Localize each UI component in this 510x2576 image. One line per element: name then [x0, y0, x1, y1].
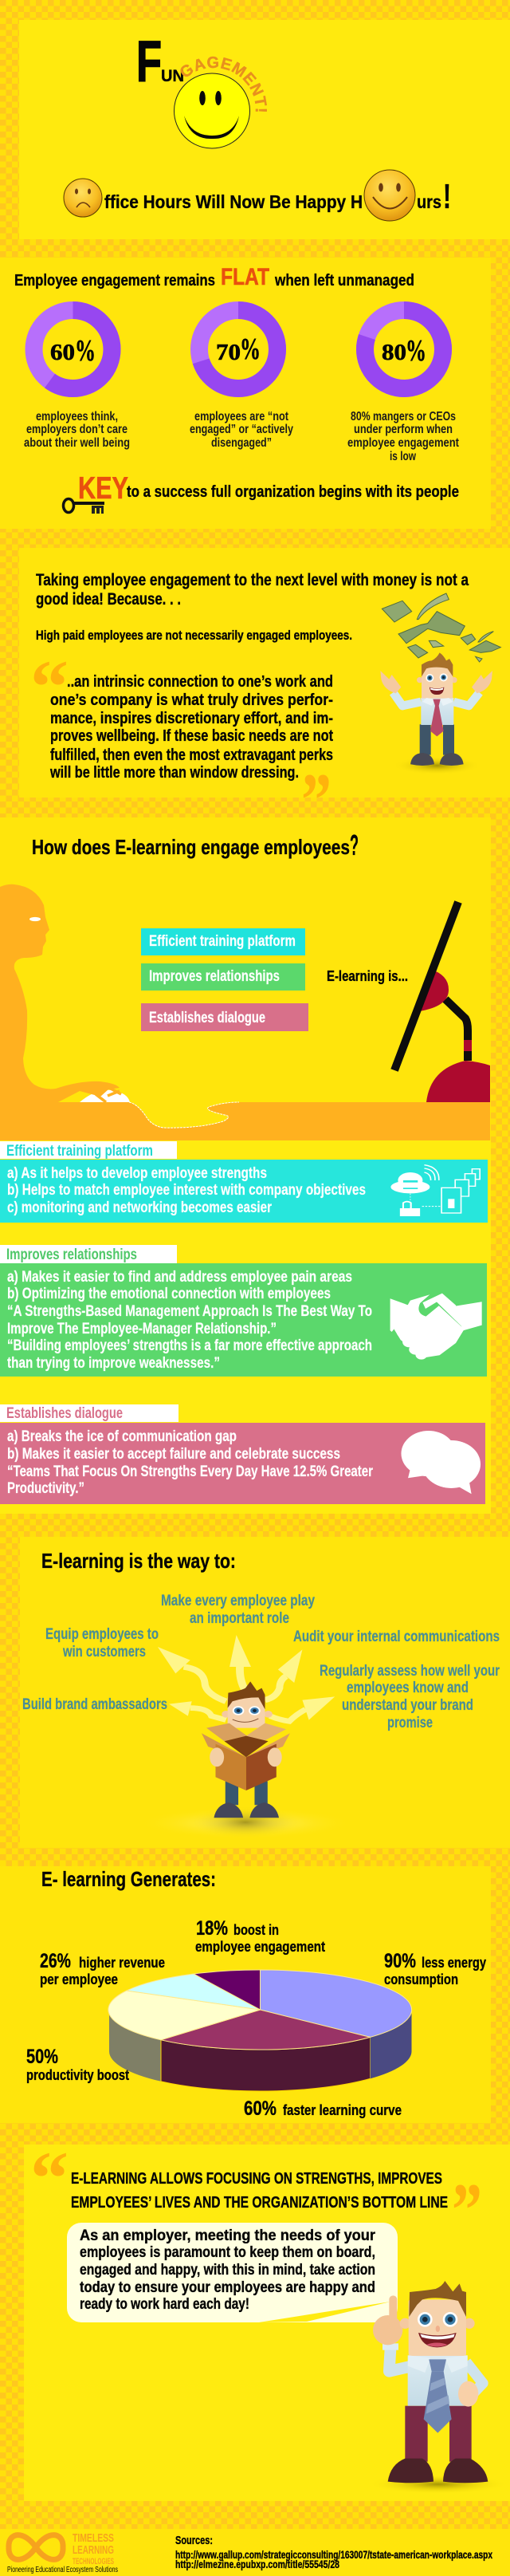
footer logo: timeless learning technologies: LEARNING	[73, 2543, 114, 2557]
panel: efficient training platform: c) monitoring and networking becomes easier	[7, 1199, 272, 1216]
icon: handshake	[390, 1294, 482, 1360]
panel: improves relationships	[0, 1245, 487, 1377]
heading: how does e-learning engage employees	[32, 829, 359, 861]
title: Fungagement: GAGEMENT!	[180, 56, 267, 112]
title: Fungagement: F	[136, 30, 162, 94]
icon: sad face	[64, 179, 102, 217]
donut chart: 80%: 80	[382, 340, 406, 365]
panel: efficient training platform: b) Helps to match employee interest with company objectives	[7, 1182, 366, 1199]
label: 18%: boost in	[233, 1922, 279, 1938]
menu box: establishes dialogue	[141, 1003, 308, 1031]
caption: 70%	[190, 410, 293, 450]
heading: engagement remains flat	[14, 264, 414, 290]
donut chart: 60%: 60	[50, 340, 75, 365]
donut chart: 60%: %	[75, 334, 96, 368]
icon: key	[64, 499, 104, 514]
sources	[175, 2534, 492, 2570]
footer logo: timeless learning technologies	[7, 2531, 118, 2574]
key message: KEY	[78, 471, 128, 506]
heading: engagement remains flat: when left unmanaged	[274, 272, 414, 290]
closing headline quote	[30, 2136, 482, 2252]
label: 26%: 26%	[40, 1950, 71, 1972]
label: 18%: 18%	[196, 1917, 228, 1940]
panel: money is not a good idea: ”	[301, 758, 332, 842]
labels: e-learning goals: Build brand ambassadors	[22, 1696, 167, 1713]
labels: e-learning goals: Equip employees to	[45, 1626, 159, 1643]
label: 60%: faster learning curve	[283, 2102, 402, 2118]
label: 50%: productivity boost	[26, 2067, 129, 2083]
donut chart: 70%: %	[240, 333, 261, 366]
sources: http://elmezine.epubxp.com/title/55545/28	[175, 2558, 339, 2570]
heading: e-learning is the way to: E-learning is the way to:	[41, 1549, 236, 1573]
speech bubble: today to ensure your employees are happy and	[80, 2279, 375, 2296]
title: Fungagement	[136, 30, 267, 148]
caption: 60%: employers don’t care	[26, 423, 128, 436]
panel: establishes dialogue	[0, 1404, 485, 1504]
caption: 70%: employees are “not	[194, 410, 289, 423]
panel: money is not a good idea: good idea! Because. . .	[36, 590, 181, 609]
panel: efficient training platform	[0, 1141, 488, 1223]
menu box: improves relationships: Improves relationships	[149, 968, 280, 985]
text block: quote	[49, 673, 333, 782]
text block: quote: ..an intrinsic connection to one’s work and	[67, 673, 333, 691]
label: 50%: 50%	[26, 2046, 58, 2068]
text block: quote: fulfilled, then even the most extravagant perks	[50, 746, 333, 764]
panel: improves relationships: than trying to improve weaknesses.”	[7, 1355, 220, 1372]
icon: big smiley	[174, 73, 250, 148]
menu box: improves relationships	[141, 963, 305, 991]
heading: how does e-learning engage employees: How does E-learning engage employees	[32, 835, 350, 859]
speech bubble	[67, 2223, 398, 2322]
panel: improves relationships: Improves relationships	[6, 1247, 137, 1263]
panel: money is not a good idea: “	[30, 644, 69, 729]
donut chart: 70%	[199, 310, 277, 388]
caption: 80%: employee engagement	[347, 436, 460, 450]
caption: 70%: disengaged”	[211, 436, 272, 450]
label: 60%: 60%	[244, 2097, 277, 2120]
key message: to a success full organization begins with its people	[127, 483, 459, 501]
caption: 80%: is low	[390, 450, 416, 463]
panel: improves relationships: a) Makes it easier to find and address employee pain areas	[7, 1269, 352, 1286]
heading: engagement remains flat: FLAT	[221, 264, 269, 290]
menu box: establishes dialogue: Establishes dialogue	[149, 1010, 265, 1026]
speech bubble: engaged and happy, with this in mind, take action	[80, 2262, 375, 2279]
monitor	[394, 902, 490, 1102]
panel: improves relationships: b) Optimizing the emotional connection with employees	[7, 1286, 331, 1302]
text block: quote: mance, inspires discretionary effort, and im-	[50, 710, 333, 727]
heading: engagement remains flat: Employee engagement remains	[14, 272, 215, 290]
label: 18%: employee engagement	[195, 1939, 325, 1955]
closing headline quote: ”	[452, 2168, 482, 2252]
illustration: person at computer	[0, 884, 490, 1140]
caption: 60%: employees think,	[36, 410, 118, 423]
subtitle: office hours	[64, 170, 451, 221]
labels: e-learning goals	[22, 1593, 500, 1731]
pie chart	[108, 1970, 412, 2091]
label: 90%: 90%	[384, 1950, 416, 1972]
label: 60%	[244, 2097, 402, 2120]
subtitle: office hours: !	[443, 177, 451, 216]
icon: speech bubbles	[401, 1431, 481, 1494]
title: Fungagement: UN	[161, 67, 184, 85]
labels: e-learning goals: promise	[387, 1715, 433, 1731]
money bills	[382, 593, 500, 662]
labels: e-learning goals: win customers	[62, 1644, 146, 1660]
icon: happy face	[364, 170, 415, 221]
label: 50%	[26, 2046, 129, 2083]
labels: e-learning goals: an important role	[190, 1610, 289, 1627]
label: 90%: less energy	[422, 1955, 486, 1971]
key message	[64, 471, 459, 514]
text block: quote: proves wellbeing. If these basic needs are not	[50, 727, 333, 745]
caption: 80%: 80% mangers or CEOs	[351, 410, 456, 423]
text block: quote: will be little more than window dressing.	[49, 764, 299, 782]
label: 18%	[195, 1917, 325, 1955]
panel: improves relationships: “Building employees’ strengths is a far more effective approach	[7, 1337, 372, 1354]
caption: 80%: under perform when	[354, 423, 453, 436]
label: 26%: per employee	[40, 1971, 118, 1987]
label: 26%: higher revenue	[79, 1955, 165, 1971]
panel: improves relationships: “A Strengths-Based Management Approach Is The Best Way To	[7, 1303, 372, 1320]
icon: cloud and devices	[390, 1165, 480, 1216]
panel: efficient training platform: a) As it helps to develop employee strengths	[7, 1165, 267, 1182]
label: 90%	[384, 1950, 486, 1987]
donut chart: 80%: %	[406, 334, 426, 368]
footer logo: timeless learning technologies: TECHNOLOGIES	[73, 2557, 114, 2566]
caption: 60%: about their well being	[24, 436, 130, 450]
sources: Sources:	[175, 2534, 213, 2547]
panel: money is not a good idea: High paid employees are not necessarily engaged employees.	[36, 628, 352, 643]
panel: efficient training platform: Efficient training platform	[6, 1143, 153, 1160]
panel: establishes dialogue: b) Makes it easier to accept failure and celebrate success	[7, 1446, 340, 1463]
panel: money is not a good idea	[30, 571, 469, 842]
label: 90%: consumption	[384, 1971, 458, 1987]
caption: 80%	[347, 410, 460, 463]
speech bubble: ready to work hard each day!	[80, 2296, 249, 2313]
footer logo: timeless learning technologies: TIMELESS	[73, 2531, 114, 2545]
heading: e-learning generates: E- learning Generates:	[41, 1867, 216, 1891]
labels: e-learning goals: Make every employee play	[161, 1593, 315, 1609]
illustration: man with flying money	[380, 593, 500, 774]
illustration: man pointing up	[369, 2281, 508, 2494]
menu box: efficient training platform: Efficient training platform	[149, 933, 296, 950]
label: e-learning is: E-learning is...	[327, 968, 408, 984]
footer logo: timeless learning technologies: Pioneering Educational Ecosystem Solutions	[7, 2566, 118, 2574]
panel: improves relationships: Improve The Employee-Manager Relationship.”	[7, 1321, 277, 1337]
speech bubble: employees is paramount to keep them on board,	[80, 2244, 375, 2261]
label: 26%	[40, 1950, 165, 1987]
illustration: arrows	[158, 1635, 335, 1721]
closing headline quote: “	[30, 2136, 69, 2220]
heading: how does e-learning engage employees: ?	[350, 829, 359, 861]
panel: establishes dialogue: a) Breaks the ice of communication gap	[7, 1428, 237, 1445]
donut chart: 70%: 70	[216, 340, 241, 365]
subtitle: office hours: urs	[417, 191, 441, 212]
panel: establishes dialogue: “Teams That Focus On Strengths Every Day Have 12.5% Greater	[7, 1463, 373, 1480]
caption: 60%	[24, 410, 130, 450]
speech bubble: As an employer, meeting the needs of your	[80, 2227, 376, 2244]
menu box: efficient training platform	[141, 928, 305, 955]
illustration: man opening box	[138, 1681, 353, 1839]
labels: e-learning goals: understand your brand	[342, 1697, 473, 1714]
panel: establishes dialogue: Establishes dialogue	[6, 1405, 123, 1422]
subtitle: office hours: ffice Hours Will Now Be Happy H	[104, 191, 363, 212]
panel: establishes dialogue: Productivity.”	[7, 1480, 84, 1497]
caption: 70%: engaged” or “actively	[190, 423, 293, 436]
donut chart: 60%	[33, 310, 112, 388]
labels: e-learning goals: employees know and	[347, 1680, 469, 1696]
text block: quote: one’s company is what truly drives perfor-	[50, 691, 333, 709]
donut chart: 80%	[365, 310, 443, 388]
